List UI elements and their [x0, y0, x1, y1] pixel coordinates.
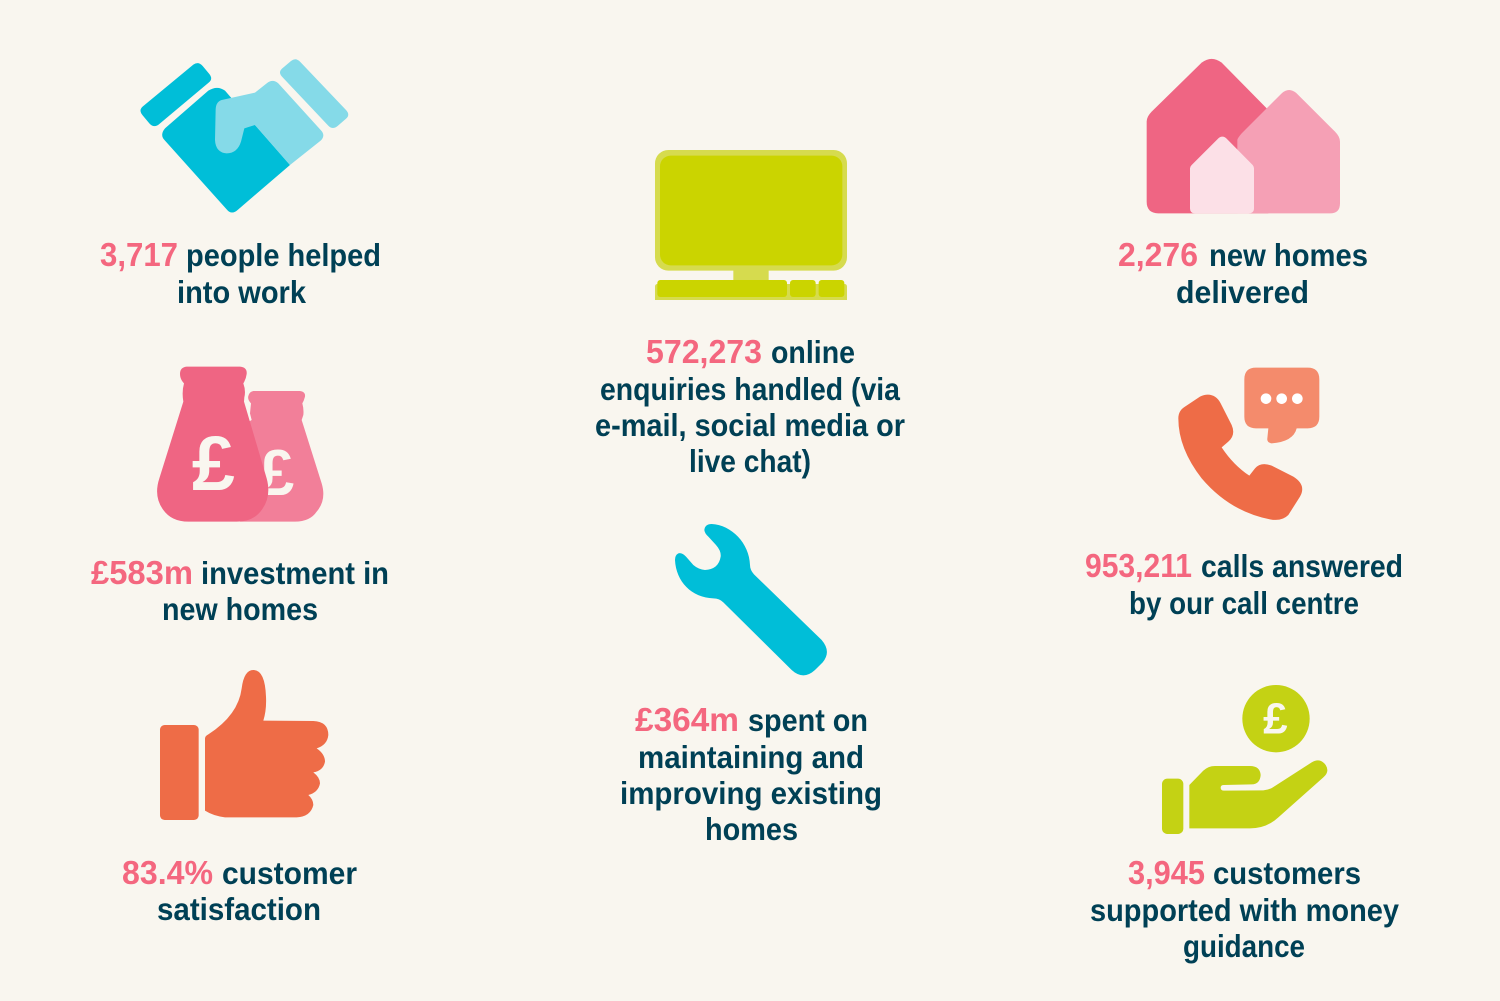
stat: calls answered: calls answered: [1201, 548, 1403, 584]
stat: people helped into work: people helped: [186, 237, 381, 273]
stat: new homes delivered: 2,276: [1118, 237, 1198, 274]
stat: people helped into work: 3,717: [100, 237, 178, 274]
stat: investment in new homes: [91, 555, 389, 627]
stat: online enquiries handled: e-mail, social media or: [595, 407, 905, 443]
stat: investment in new homes: £583m: [91, 555, 193, 592]
stat: people helped into work: [100, 237, 381, 310]
icon: money bags: £: [192, 421, 235, 507]
stat: online enquiries handled: live chat): [689, 443, 811, 479]
stat: customers supported with money guidance: [1090, 855, 1399, 964]
icon: houses: [1147, 59, 1340, 213]
stat: new homes delivered: new homes: [1209, 237, 1368, 273]
stat: maintenance spend: £364m: [635, 702, 739, 739]
icon: hand with pound coin: £: [1263, 694, 1288, 743]
icon: handshake: [140, 59, 348, 212]
stat: online enquiries handled: online: [771, 334, 855, 370]
stat: calls answered: 953,211: [1085, 548, 1192, 585]
stat: investment in new homes: investment in: [201, 555, 389, 591]
stat: customers supported with money guidance: 3,945: [1128, 855, 1205, 892]
stat: customer satisfaction: 83.4%: [122, 855, 213, 892]
stat: online enquiries handled: [595, 334, 905, 479]
stat: calls answered: by our call centre: [1129, 585, 1359, 621]
stat: customer satisfaction: [122, 855, 357, 927]
stat: customers supported with money guidance: supported with money: [1090, 892, 1399, 928]
stat: new homes delivered: [1118, 237, 1368, 310]
stat: online enquiries handled: enquiries handled (via: [600, 371, 900, 407]
icon: wrench: [675, 524, 827, 675]
stat: customer satisfaction: satisfaction: [157, 891, 321, 927]
stat: people helped into work: into work: [177, 274, 306, 310]
stat: calls answered: [1085, 548, 1403, 621]
stat: investment in new homes: new homes: [162, 591, 318, 627]
stat: maintenance spend: improving existing: [620, 775, 882, 811]
icon: hand with pound coin: [1162, 685, 1327, 834]
icon: telephone with speech bubble: [1178, 368, 1319, 520]
stat: customers supported with money guidance: customers: [1213, 855, 1361, 891]
stat: customer satisfaction: customer: [222, 855, 357, 891]
stat: maintenance spend: [620, 702, 882, 847]
icon: money bags: £: [258, 436, 294, 509]
stat: maintenance spend: maintaining and: [638, 739, 864, 775]
stat: customers supported with money guidance: guidance: [1183, 928, 1305, 964]
icon: thumbs up: [160, 670, 328, 820]
stat: online enquiries handled: 572,273: [646, 334, 762, 371]
icon: money bags: [157, 367, 323, 522]
icon: computer monitor: [655, 150, 847, 300]
stat: maintenance spend: spent on: [748, 702, 868, 738]
stat: new homes delivered: delivered: [1176, 274, 1309, 310]
stat: maintenance spend: homes: [705, 811, 798, 847]
